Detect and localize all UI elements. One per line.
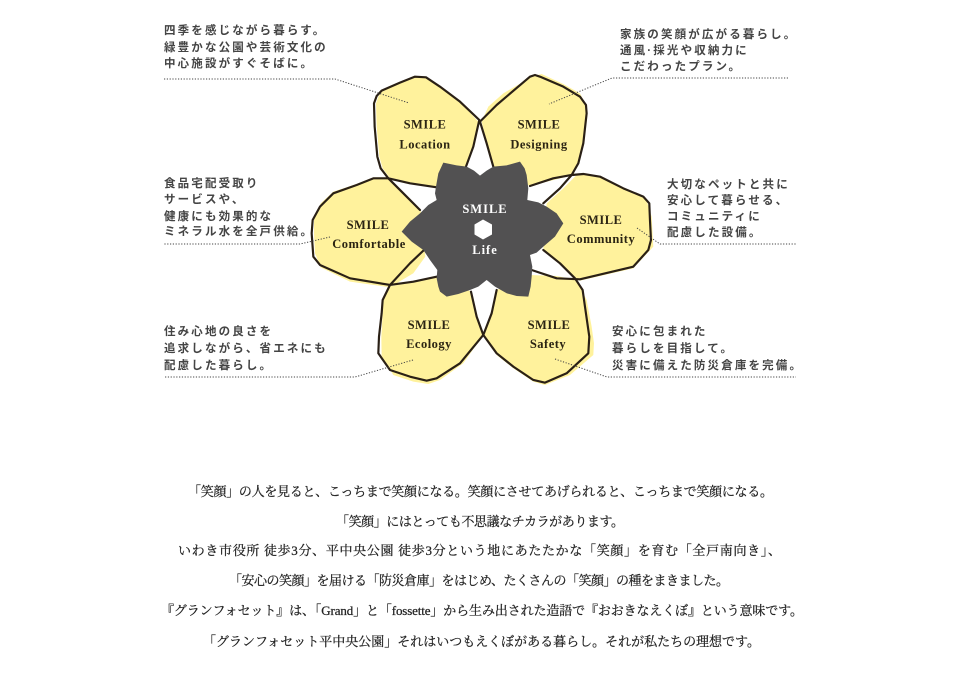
leader line: Ecology [164,360,413,377]
label: Ecology [164,324,328,372]
label: Comfortable: 健康にも効果的な [164,209,273,223]
petal label: Designing: Designing [510,138,568,152]
petal label: Safety [528,318,570,351]
petal label: Ecology [406,318,452,351]
petal label: Community: Community [567,232,635,246]
petal label: Designing: SMILE [518,118,560,132]
center flower: Life [472,243,498,257]
petal label: Community [567,213,635,246]
label: Comfortable: サービスや、 [164,192,246,206]
label: Comfortable [164,176,314,238]
label: Location: 中心施設がすぐそばに。 [164,56,314,70]
leader line: Location [164,79,409,103]
label: Location: 緑豊かな公園や芸術文化の [164,40,328,54]
body text: 「笑顔」の人を見ると、こっちまで笑顔になる。笑顔にさせてあげられると、こっちまで笑顔になる。 [188,484,773,499]
label: Community: コミュニティに [667,210,762,223]
petal label: Location [399,118,451,152]
center flower [402,162,563,297]
label: Community: 配慮した設備。 [667,225,763,239]
petal label: Comfortable: SMILE [347,218,389,232]
leader line: Designing [549,78,788,104]
label: Ecology: 住み心地の良さを [164,324,273,338]
body text: いわき市役所 徒歩3分、平中央公園 徒歩3分という地にあたたかな「笑顔」を育む「全戸南向き」、 [178,543,781,558]
petal label: Ecology: SMILE [408,318,450,332]
leader line: Community [637,228,796,244]
center flower: SMILE [462,202,508,216]
body text: 「笑顔」にはとっても不思議なチカラがあります。 [336,514,624,529]
label: Designing: 家族の笑顔が広がる暮らし。 [620,27,797,41]
label: Designing: 通風·採光や収納力に [620,43,749,57]
label: Safety [612,324,803,372]
body text: 「安心の笑顔」を届ける「防災倉庫」をはじめ、たくさんの「笑顔」の種をまきました。 [229,573,729,588]
label: Designing [620,27,797,73]
petal label: Safety: Safety [530,337,566,351]
petal label: Location: SMILE [404,118,446,132]
petal label: Designing [510,118,568,152]
label: Community [667,177,790,239]
label: Safety: 安心に包まれた [612,324,708,338]
petal label: Community: SMILE [580,213,622,227]
label: Location [164,23,328,70]
label: Ecology: 追求しながら、省エネにも [164,341,328,355]
body text: 『グランフォセット』は、「Grand」と「fossette」から生み出された造語で『おおきなえくぼ』という意味です。 [161,603,803,618]
label: Comfortable: ミネラル水を全戸供給。 [164,224,314,238]
label: Designing: こだわったプラン。 [620,60,742,73]
petal label: Ecology: Ecology [406,337,452,351]
petal label: Comfortable [332,218,406,251]
petal label: Comfortable: Comfortable [332,237,406,251]
label: Safety: 暮らしを目指して。 [612,341,734,355]
petal outlines [312,75,651,383]
petal label: Safety: SMILE [528,318,570,332]
label: Safety: 災害に備えた防災倉庫を完備。 [612,358,803,372]
petal fills [314,74,653,385]
label: Comfortable: 食品宅配受取り [164,176,260,190]
label: Location: 四季を感じながら暮らす。 [164,23,326,37]
label: Community: 安心して暮らせる、 [667,193,789,207]
label: Ecology: 配慮した暮らし。 [164,358,273,372]
leader line: Comfortable [164,237,330,244]
leader line: Safety [555,359,796,377]
label: Community: 大切なペットと共に [667,177,790,191]
petal label: Location: Location [399,138,451,152]
icon: hexagon [474,220,492,240]
body text: 「グランフォセット平中央公園」それはいつもえくぼがある暮らし。それが私たちの理想です。 [203,634,760,649]
body text [161,484,803,649]
